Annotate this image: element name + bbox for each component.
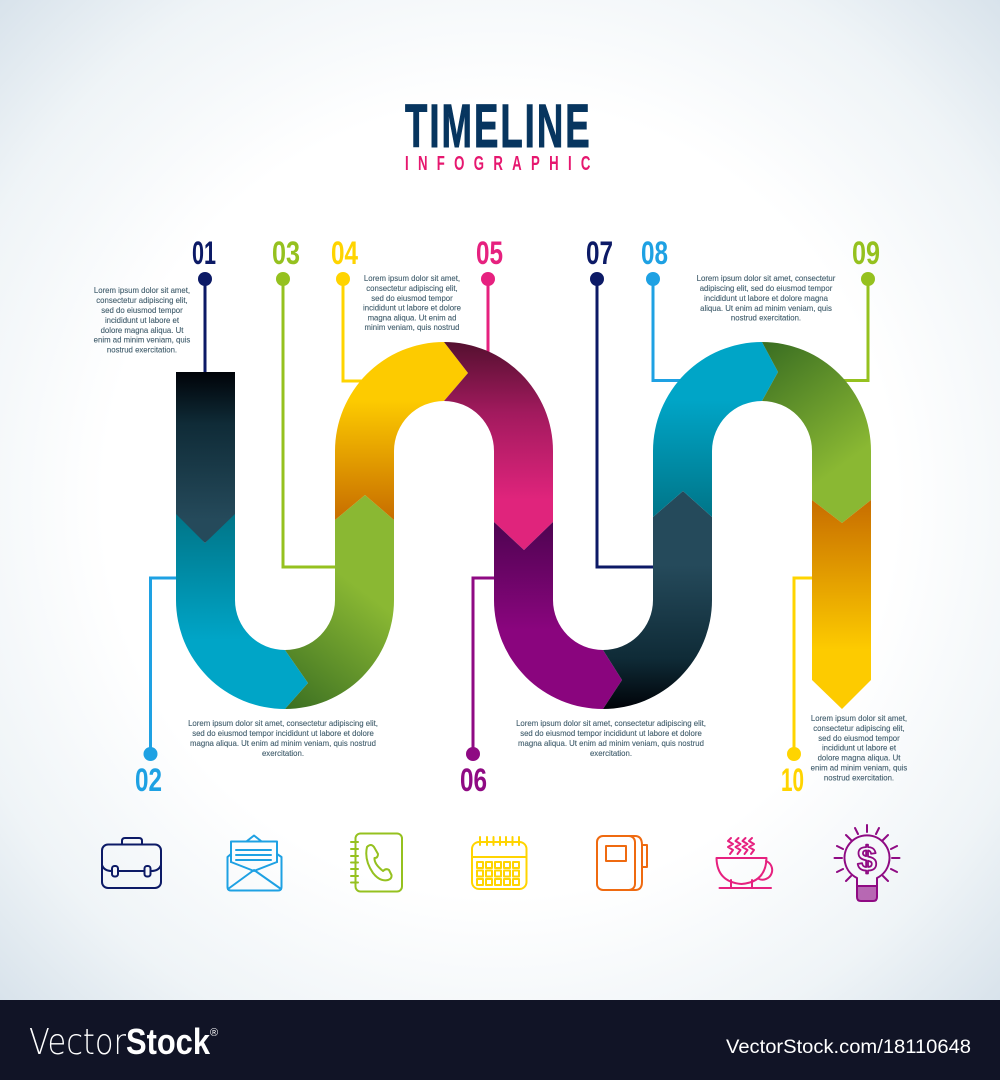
connector 10 [787,578,813,761]
text: step 06: Lorem ipsum dolor sit amet, consectetur adipiscing elit, [516,719,706,728]
text: step 08: nostrud exercitation. [731,314,801,322]
number 02: 02 [135,762,162,798]
connector 04 [336,272,366,381]
text: step 01: enim ad minim veniam, quis [94,336,190,344]
text: step 10: incididunt ut labore et [822,744,897,752]
text: step 02: Lorem ipsum dolor sit amet, consectetur adipiscing elit, [188,719,378,728]
icon: idea bulb with dollar [834,825,900,901]
number 05: 05 [476,235,503,271]
segment 01 [176,372,235,543]
number 09: 09 [852,235,880,271]
segment 02 [176,510,308,709]
text: step 01: sed do eiusmod tempor [101,306,183,315]
connector 03 [276,272,336,567]
text: step 10: nostrud exercitation. [824,774,894,782]
segment 08 [653,342,778,517]
segment 04 [335,342,468,520]
number 04: 04 [331,235,358,271]
text: step 08: Lorem ipsum dolor sit amet, consectetur [697,274,836,283]
icon: idea bulb with dollar: $ [857,840,877,879]
connector 09 [840,272,875,380]
number 03: 03 [272,235,300,271]
text: step 08: incididunt ut labore et dolore magna [704,294,829,303]
footer image id: VectorStock.com/18110648 [726,1037,971,1058]
icon: notebook [597,836,647,890]
step numbers [135,235,880,798]
text: step 04: Lorem ipsum dolor sit amet, [364,274,460,283]
text: step 01: Lorem ipsum dolor sit amet, [94,286,190,295]
text: step 06: magna aliqua. Ut enim ad minim veniam, quis nostrud [518,739,704,748]
footer bar [0,1000,1000,1080]
number 07: 07 [586,235,613,271]
icon: envelope [228,836,282,890]
icon row [102,825,900,901]
text blocks [94,274,907,782]
text: step 02: sed do eiusmod tempor incididunt ut labore et dolore [192,729,374,738]
text: step 10: enim ad minim veniam, quis [811,764,907,772]
segment 05 [444,342,553,550]
footer logo: ® [210,1027,218,1039]
icon: phone book [351,834,402,892]
number 10: 10 [781,762,804,798]
heading: timeline: TIMELINE [405,91,592,160]
text: step 04: sed do eiusmod tempor [371,294,453,303]
text: step 04: incididunt ut labore et dolore [363,304,461,312]
segment 07 [603,491,712,709]
text: step 08: aliqua. Ut enim ad minim veniam, quis [700,304,832,313]
text: step 10: consectetur adipiscing elit, [813,724,905,733]
segment 03 [285,495,394,709]
text: step 01: dolore magna aliqua. Ut [101,326,184,335]
text: step 06: exercitation. [590,749,632,758]
connector 06 [466,578,495,761]
connector 07 [590,272,654,567]
text: step 01: nostrud exercitation. [107,346,177,354]
number 06: 06 [460,762,487,798]
number 08: 08 [641,235,668,271]
text: step 10: sed do eiusmod tempor [818,734,900,743]
icon: coffee cup [716,838,772,888]
connector 08 [646,272,685,380]
winding timeline ribbon [176,342,871,709]
number 01: 01 [192,235,216,271]
connector lines and dots [144,272,875,761]
text: step 01: consectetur adipiscing elit, [96,296,188,305]
segment 06 [494,522,622,709]
text: step 04: consectetur adipiscing elit, [366,284,458,293]
title [405,91,592,175]
icon: briefcase [102,838,161,888]
text: step 01: incididunt ut labore et [105,316,180,325]
text: step 04: magna aliqua. Ut enim ad [368,314,456,322]
text: step 10: dolore magna aliqua. Ut [818,754,901,762]
footer logo: VectorStock [29,1021,224,1063]
text: step 02: magna aliqua. Ut enim ad minim veniam, quis nostrud [190,739,376,748]
text: step 02: exercitation. [262,749,304,758]
connector 05 [481,272,495,352]
connector 01 [198,272,212,372]
segment 09 [762,342,871,523]
subheading: infographic: INFOGRAPHIC [405,152,590,175]
text: step 04: minim veniam, quis nostrud [365,323,459,332]
text: step 08: adipiscing elit, sed do eiusmod tempor [700,284,833,293]
icon: calendar [472,837,526,889]
text: step 10: Lorem ipsum dolor sit amet, [811,714,907,723]
segment 10 [812,500,871,709]
connector 02 [144,578,177,761]
text: step 06: sed do eiusmod tempor incididunt ut labore et dolore [520,729,702,738]
